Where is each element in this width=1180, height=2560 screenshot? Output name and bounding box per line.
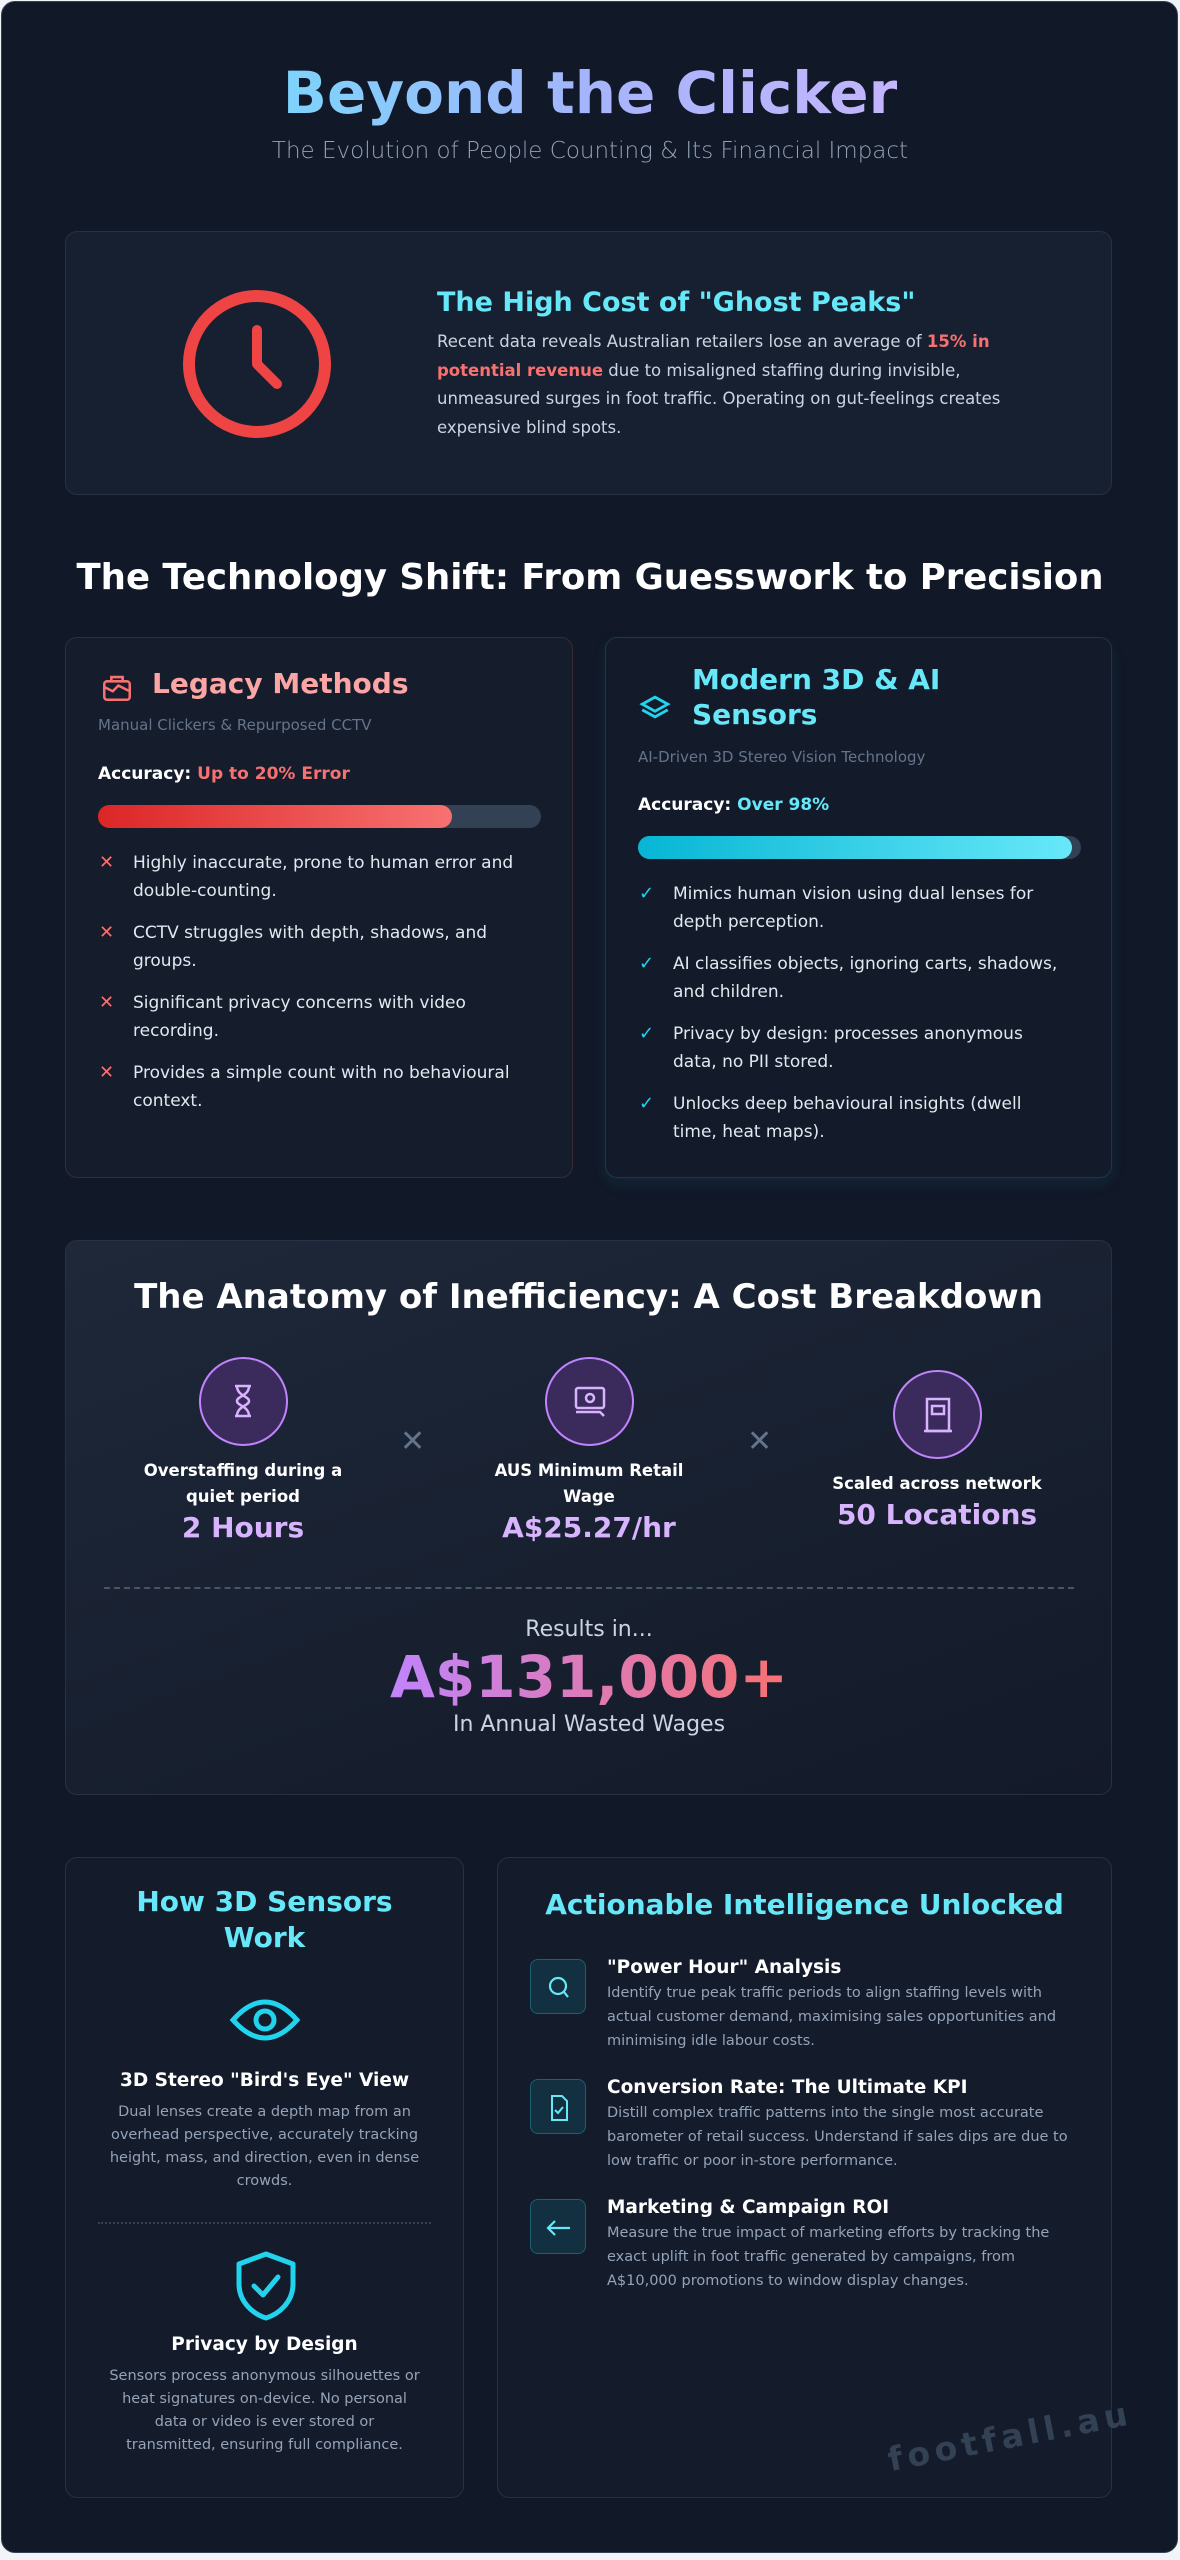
text: birds eye view: Dual lenses create a depth map from an overhead perspective, accurately tracking height, mass, and direction, even in dense crowds. [110, 2104, 419, 2189]
panel: legacy methods: ✕ [99, 1062, 114, 1083]
heading: ghost peaks: The High Cost of "Ghost Peaks" [437, 287, 915, 318]
list: legacy: Significant privacy concerns with video recording. [133, 993, 466, 1041]
factor: wage: AUS Minimum Retail Wage [495, 1461, 683, 1506]
list: modern: Privacy by design: processes anonymous data, no PII stored. [673, 1024, 1023, 1072]
heading: legacy: Legacy Methods [152, 667, 408, 700]
panel: modern sensors: ✓ [639, 953, 654, 974]
panel: legacy methods: ✕ [99, 992, 114, 1013]
factor: hours: Overstaffing during a quiet period [144, 1461, 342, 1506]
icon: layers [639, 696, 671, 718]
icon: shield [236, 2252, 296, 2320]
item: power hour [530, 1957, 1056, 2049]
multiply sign: ✕ [400, 1424, 425, 1459]
panel: actionable intelligence [497, 1857, 1112, 2498]
item: conversion rate: Conversion Rate: The Ultimate KPI [607, 2077, 968, 2098]
subtitle: The Evolution of People Counting & Its Financial Impact [272, 138, 908, 164]
multiply sign: ✕ [747, 1424, 772, 1459]
result [104, 1587, 1074, 1777]
panel: legacy methods [65, 637, 573, 1178]
list: modern [639, 883, 1057, 1142]
panel: legacy methods: ✕ [99, 922, 114, 943]
item: marketing roi: Marketing & Campaign ROI [607, 2197, 889, 2218]
item: conversion rate: Distill complex traffic patterns into the single most accurate barometer of retail success. Understand if sales dips are due to low traffic or poor in-store performance. [607, 2105, 1068, 2169]
text: privacy by design: Privacy by Design [171, 2334, 358, 2355]
icon: clock [183, 290, 331, 438]
bar: modern [638, 836, 1081, 859]
factor: wage [494, 1357, 683, 1544]
item: power hour: Identify true peak traffic periods to align staffing levels with actual customer demand, maximising sales opportunities and minimising idle labour costs. [607, 1985, 1056, 2049]
icon: search [530, 1959, 586, 2014]
factor: locations: 50 Locations [837, 1498, 1037, 1531]
item: marketing roi: Measure the true impact of marketing efforts by tracking the exact uplift in foot traffic generated by campaigns, from A$10,000 promotions to window display changes. [607, 2225, 1049, 2289]
list: legacy: CCTV struggles with depth, shadows, and groups. [133, 923, 487, 971]
watermark: footfall.au [885, 2393, 1135, 2479]
factor: hours: 2 Hours [182, 1511, 304, 1544]
heading: cost breakdown: The Anatomy of Inefficiency: A Cost Breakdown [134, 1277, 1043, 1317]
panel: modern sensors: ✓ [639, 1093, 654, 1114]
heading: how sensors work: How 3D Sensors [136, 1885, 393, 1918]
accuracy: legacy: Accuracy: Up to 20% Error [98, 764, 350, 784]
list: modern: Mimics human vision using dual lenses for depth perception. [673, 884, 1033, 932]
subtitle: modern: AI-Driven 3D Stereo Vision Technology [638, 748, 925, 766]
icon: store [892, 1370, 982, 1459]
text: birds eye view: 3D Stereo "Bird's Eye" View [120, 2070, 409, 2091]
icon: arrow [530, 2199, 586, 2254]
icon: hourglass [198, 1357, 288, 1446]
icon: legacy [102, 676, 132, 701]
list: modern: Unlocks deep behavioural insights (dwell time, heat maps). [673, 1094, 1021, 1142]
icon: document [530, 2079, 586, 2134]
heading: modern: Modern 3D & AI Sensors [692, 663, 940, 731]
list: modern: AI classifies objects, ignoring carts, shadows, and children. [673, 954, 1057, 1002]
panel: modern sensors [605, 637, 1112, 1178]
result: Results in... [525, 1617, 653, 1642]
panel: cost breakdown [65, 1240, 1112, 1795]
heading: how sensors work [136, 1885, 393, 1954]
text: ghost peaks body: Recent data reveals Australian retailers lose an average of 15% in potential revenue due to misaligned staffing during invisible, unmeasured surges in foot traffic. Operating on gut-feelings creates expensive blind spots. [437, 332, 1000, 436]
list: legacy [99, 852, 513, 1111]
icon: eye [230, 2000, 300, 2040]
factor: wage: A$25.27/hr [502, 1511, 676, 1544]
bar: legacy [98, 805, 541, 828]
panel: ghost peaks [65, 231, 1112, 495]
panel: modern sensors: ✓ [639, 883, 654, 904]
panel: how sensors work [65, 1857, 464, 2498]
list: legacy: Highly inaccurate, prone to human error and double-counting. [133, 853, 513, 901]
accuracy: modern: Accuracy: Over 98% [638, 795, 829, 815]
panel: modern sensors: ✓ [639, 1023, 654, 1044]
subtitle: legacy: Manual Clickers & Repurposed CCTV [98, 716, 372, 734]
heading: technology shift: The Technology Shift: From Guesswork to Precision [76, 557, 1104, 598]
item: conversion rate [530, 2077, 1068, 2169]
item: power hour: "Power Hour" Analysis [607, 1957, 841, 1978]
icon: money [544, 1357, 634, 1446]
list: legacy: Provides a simple count with no behavioural context. [133, 1063, 510, 1111]
factor: hours [144, 1357, 342, 1544]
title: Beyond the Clicker [283, 59, 897, 127]
factor: locations: Scaled across network [832, 1474, 1042, 1493]
result: A$131,000+ [390, 1643, 788, 1711]
heading: actionable intelligence: Actionable Intelligence Unlocked [545, 1888, 1064, 1921]
factor: locations [832, 1370, 1042, 1531]
item: marketing roi [530, 2197, 1049, 2289]
heading: how sensors work: Work [224, 1921, 305, 1954]
text: privacy by design: Sensors process anonymous silhouettes or heat signatures on-device. No personal data or video is ever stored or transmitted, ensuring full compliance. [109, 2368, 420, 2453]
panel: legacy methods: ✕ [99, 852, 114, 873]
result: In Annual Wasted Wages [453, 1712, 725, 1737]
